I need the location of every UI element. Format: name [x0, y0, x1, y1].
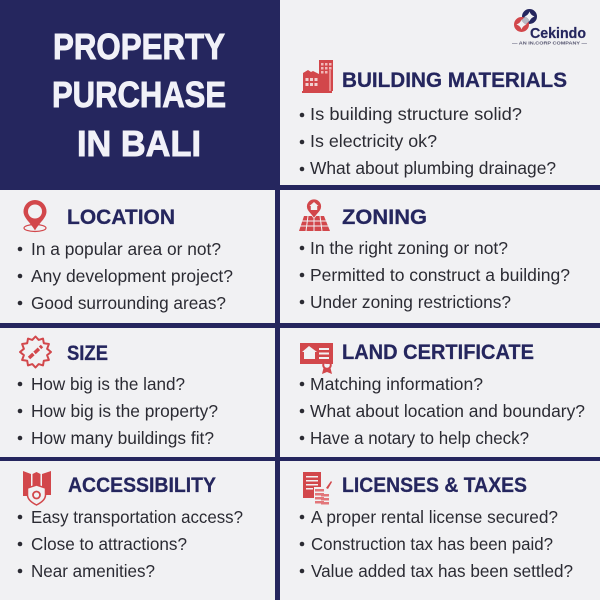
- icon: map pin: [24, 200, 46, 232]
- heading: LOCATION: [67, 206, 175, 229]
- list: Near amenities?: [31, 561, 155, 581]
- list: [300, 374, 585, 448]
- icon: zoning map: [299, 199, 330, 231]
- list: What about plumbing drainage?: [310, 158, 556, 178]
- panel: licenses and taxes: [300, 472, 573, 581]
- panel: size: [18, 336, 218, 448]
- list: In a popular area or not?: [31, 239, 221, 259]
- icon: certificate: [300, 343, 333, 374]
- panel: accessibility: [18, 471, 243, 581]
- logo: Cekindo: — AN IN.CORP COMPANY —: [512, 40, 588, 46]
- heading: ZONING: [342, 206, 427, 229]
- list: A proper rental license secured?: [311, 507, 558, 527]
- list: What about location and boundary?: [310, 401, 585, 421]
- list: In the right zoning or not?: [310, 238, 508, 258]
- title: [52, 26, 226, 164]
- list: Construction tax has been paid?: [311, 534, 553, 554]
- logo: Cekindo: Cekindo: [530, 25, 586, 42]
- panel: land certificate: [300, 341, 585, 448]
- list: [18, 374, 218, 448]
- list: Easy transportation access?: [31, 507, 243, 527]
- list: Is building structure solid?: [310, 104, 522, 124]
- list: [18, 507, 243, 581]
- list: [300, 104, 556, 178]
- heading: BUILDING MATERIALS: [342, 69, 567, 92]
- heading: SIZE: [67, 342, 108, 365]
- list: Matching information?: [310, 374, 483, 394]
- icon: buildings: [302, 60, 333, 93]
- list: How big is the property?: [31, 401, 218, 421]
- panel: title background: [0, 0, 279, 187]
- list: Good surrounding areas?: [31, 293, 226, 313]
- list: Have a notary to help check?: [310, 428, 529, 448]
- list: Value added tax has been settled?: [311, 561, 573, 581]
- icon: size badge: [20, 336, 51, 368]
- list: Close to attractions?: [31, 534, 187, 554]
- heading: LAND CERTIFICATE: [342, 341, 534, 364]
- list: [300, 507, 573, 581]
- title: PROPERTY: [53, 26, 225, 67]
- panel: zoning: [299, 199, 570, 312]
- panel: building materials: [300, 60, 567, 178]
- list: Any development project?: [31, 266, 233, 286]
- title: PURCHASE: [52, 74, 226, 115]
- list: How many buildings fit?: [31, 428, 214, 448]
- list: [300, 238, 570, 312]
- icon: map shield: [23, 471, 51, 505]
- list: How big is the land?: [31, 374, 185, 394]
- list: [18, 239, 233, 313]
- icon: document and coins: [303, 472, 332, 504]
- heading: LICENSES & TAXES: [342, 474, 527, 497]
- heading: ACCESSIBILITY: [68, 474, 216, 497]
- title: IN BALI: [77, 123, 201, 164]
- list: Is electricity ok?: [310, 131, 437, 151]
- panel: location: [18, 200, 233, 313]
- list: Under zoning restrictions?: [310, 292, 511, 312]
- logo: Cekindo: [512, 9, 588, 46]
- list: Permitted to construct a building?: [310, 265, 570, 285]
